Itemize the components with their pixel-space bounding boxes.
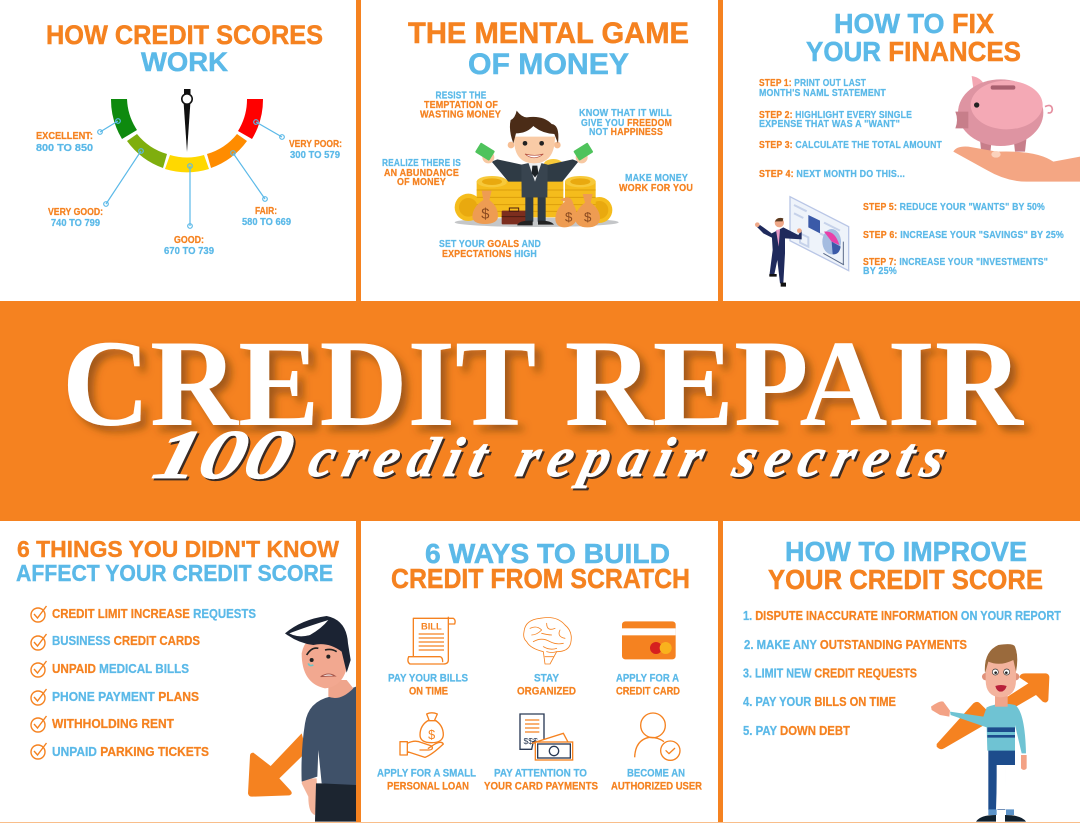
label: very good: VERY GOOD:	[48, 206, 103, 218]
businessman figure	[475, 111, 593, 225]
label: very poor: 300 TO 579	[290, 149, 340, 161]
numbered list: 5. PAY DOWN DEBT	[743, 724, 850, 738]
bag and briefcase details: $	[481, 207, 489, 223]
icon: authorized user	[635, 713, 680, 760]
caption: card payments	[484, 768, 598, 792]
steps 5 to 7: BY 25%	[863, 266, 897, 277]
text: goals and expectations: EXPECTATIONS HIGH	[442, 249, 537, 260]
bag and briefcase details: $	[565, 209, 573, 224]
panel: 6 things you didn't know	[16, 536, 356, 822]
caption: pay your bills	[388, 672, 468, 698]
illustration: happy man with rising arrow	[931, 644, 1049, 822]
banner	[0, 301, 1080, 521]
banner subtitle: credit repair secrets	[303, 427, 952, 489]
steps 5 to 7: STEP 6: INCREASE YOUR "SAVINGS" BY 25%	[863, 230, 1064, 241]
caption: apply for credit card: CREDIT CARD	[616, 686, 680, 698]
heading: how to fix your finances	[806, 8, 1021, 67]
label: fair: 580 TO 669	[242, 216, 291, 228]
bag and briefcase details	[472, 191, 600, 227]
label: very good	[48, 206, 103, 229]
caption: stay organized: STAY	[534, 672, 560, 684]
icon: receipt and cash	[520, 714, 573, 760]
banner subtitle	[146, 417, 952, 494]
panel: how to improve your credit score	[743, 536, 1061, 822]
caption: personal loan	[377, 768, 476, 792]
caption: personal loan: PERSONAL LOAN	[387, 780, 469, 792]
list of things: UNPAID PARKING TICKETS	[52, 745, 209, 759]
caption: apply for credit card: APPLY FOR A	[616, 672, 679, 684]
heading: 6 ways: CREDIT FROM SCRATCH	[391, 563, 690, 594]
icon: bill	[408, 617, 455, 664]
heading: how credit scores work: WORK	[141, 47, 229, 77]
icon: bill: BILL	[421, 621, 442, 631]
text: abundance of money: OF MONEY	[397, 177, 446, 188]
caption: card payments: YOUR CARD PAYMENTS	[484, 780, 598, 792]
numbered list: 4. PAY YOUR BILLS ON TIME	[743, 695, 896, 709]
label: good: GOOD:	[174, 234, 204, 246]
text: abundance of money	[382, 158, 461, 188]
panel: 6 ways to build credit	[377, 538, 702, 792]
label: fair: FAIR:	[255, 205, 277, 217]
text: make money work: WORK FOR YOU	[619, 183, 693, 194]
caption: authorized user: BECOME AN	[627, 768, 685, 780]
heading: the mental game of money: THE MENTAL GAME	[408, 17, 689, 50]
list of things: CREDIT LIMIT INCREASE REQUESTS	[52, 607, 256, 621]
illustration: presenter with chart board	[755, 197, 849, 287]
caption: pay your bills: PAY YOUR BILLS	[388, 672, 468, 684]
panel: how to fix your finances	[755, 8, 1080, 287]
steps 1 to 4: EXPENSE THAT WAS A "WANT"	[759, 119, 900, 130]
label: good	[164, 234, 214, 257]
list of things: WITHHOLDING RENT	[52, 717, 174, 731]
illustration: piggy bank on hand	[953, 76, 1080, 182]
text: abundance of money: AN ABUNDANCE	[384, 168, 459, 179]
label: excellent: 800 TO 850	[36, 142, 93, 154]
text: resist temptation: TEMPTATION OF	[424, 100, 498, 111]
heading: how credit scores work	[46, 20, 323, 77]
steps 5 to 7	[863, 202, 1064, 277]
label: very good: 740 TO 799	[51, 217, 100, 229]
icon: money bag in hand	[400, 713, 443, 757]
text: resist temptation: WASTING MONEY	[420, 110, 501, 120]
caption: pay your bills: ON TIME	[409, 686, 448, 698]
heading: the mental game of money	[408, 17, 689, 81]
text: freedom not happiness: NOT HAPPINESS	[589, 127, 663, 138]
heading: how credit scores work: HOW CREDIT SCORES	[46, 20, 323, 50]
panel: how credit scores work	[36, 20, 342, 257]
illustration: businessman with coins	[455, 111, 619, 227]
label: very poor: VERY POOR:	[289, 138, 342, 150]
illustration: sad man with down arrow	[248, 616, 356, 822]
list of things: PHONE PAYMENT PLANS	[52, 690, 199, 704]
label: excellent	[36, 130, 93, 154]
heading: how to fix your finances: HOW TO FIX	[834, 8, 994, 39]
numbered list: 2. MAKE ANY OUTSTANDING PAYMENTS	[744, 638, 967, 652]
icon: credit card	[622, 621, 676, 659]
caption: authorized user	[611, 768, 702, 792]
text: freedom not happiness	[579, 108, 672, 138]
icon: brain	[524, 617, 571, 664]
steps 1 to 4: MONTH'S NAML STATEMENT	[759, 88, 886, 99]
list of things: BUSINESS CREDIT CARDS	[52, 634, 200, 648]
text: freedom not happiness: GIVE YOU FREEDOM	[581, 118, 672, 129]
text: freedom not happiness: KNOW THAT IT WILL	[579, 108, 672, 119]
steps 1 to 4: STEP 3: CALCULATE THE TOTAL AMOUNT	[759, 140, 942, 151]
check icons	[31, 606, 46, 759]
banner title: CREDIT REPAIR	[62, 315, 1024, 452]
heading: 6 things	[16, 536, 339, 586]
label: excellent: EXCELLENT:	[36, 130, 93, 142]
list of things: UNPAID MEDICAL BILLS	[52, 662, 189, 676]
gauge chart	[111, 99, 263, 172]
numbered list	[743, 609, 1061, 738]
steps 5 to 7: STEP 5: REDUCE YOUR "WANTS" BY 50%	[863, 202, 1045, 213]
panel: the mental game of money	[382, 17, 693, 260]
caption: authorized user: AUTHORIZED USER	[611, 780, 702, 792]
icon: money bag in hand: $	[428, 728, 435, 742]
caption: personal loan: APPLY FOR A SMALL	[377, 768, 476, 780]
banner subtitle: 100	[146, 417, 301, 494]
label: good: 670 TO 739	[164, 245, 214, 257]
icon: receipt and cash: $$$	[523, 736, 538, 746]
text: abundance of money: REALIZE THERE IS	[382, 158, 461, 169]
steps 1 to 4	[759, 78, 942, 180]
caption: stay organized	[517, 672, 576, 698]
heading: the mental game of money: OF MONEY	[468, 48, 629, 81]
heading: 6 ways: 6 WAYS TO BUILD	[425, 538, 670, 569]
list of things	[52, 607, 256, 759]
heading: 6 ways	[391, 538, 690, 594]
text: goals and expectations	[439, 239, 541, 260]
text: make money work	[619, 173, 693, 194]
heading: 6 things: AFFECT YOUR CREDIT SCORE	[16, 560, 333, 586]
label: fair	[242, 205, 291, 228]
bag and briefcase details: $	[584, 209, 592, 224]
steps 1 to 4: STEP 1: PRINT OUT LAST	[759, 78, 866, 89]
text: make money work: MAKE MONEY	[625, 173, 688, 184]
text: resist temptation	[420, 90, 501, 120]
steps 1 to 4: STEP 2: HIGHLIGHT EVERY SINGLE	[759, 110, 912, 121]
steps 5 to 7: STEP 7: INCREASE YOUR "INVESTMENTS"	[863, 257, 1048, 268]
caption: apply for credit card	[616, 672, 680, 698]
heading: 6 things: 6 THINGS YOU DIDN'T KNOW	[17, 536, 339, 562]
label: very poor	[289, 138, 342, 161]
text: goals and expectations: SET YOUR GOALS AND	[439, 239, 541, 250]
numbered list: 3. LIMIT NEW CREDIT REQUESTS	[743, 666, 917, 680]
numbered list: 1. DISPUTE INACCURATE INFORMATION ON YOUR REPORT	[743, 609, 1061, 623]
caption: card payments: PAY ATTENTION TO	[494, 768, 587, 780]
heading: how to improve: HOW TO IMPROVE	[785, 536, 1027, 567]
steps 1 to 4: STEP 4: NEXT MONTH DO THIS...	[759, 169, 905, 180]
caption: stay organized: ORGANIZED	[517, 686, 576, 698]
heading: how to improve	[768, 536, 1043, 595]
gauge needle	[182, 89, 192, 152]
text: resist temptation: RESIST THE	[436, 90, 487, 102]
heading: how to improve: YOUR CREDIT SCORE	[768, 564, 1043, 595]
heading: how to fix your finances: YOUR FINANCES	[806, 36, 1021, 67]
gauge callout lines	[98, 119, 284, 228]
